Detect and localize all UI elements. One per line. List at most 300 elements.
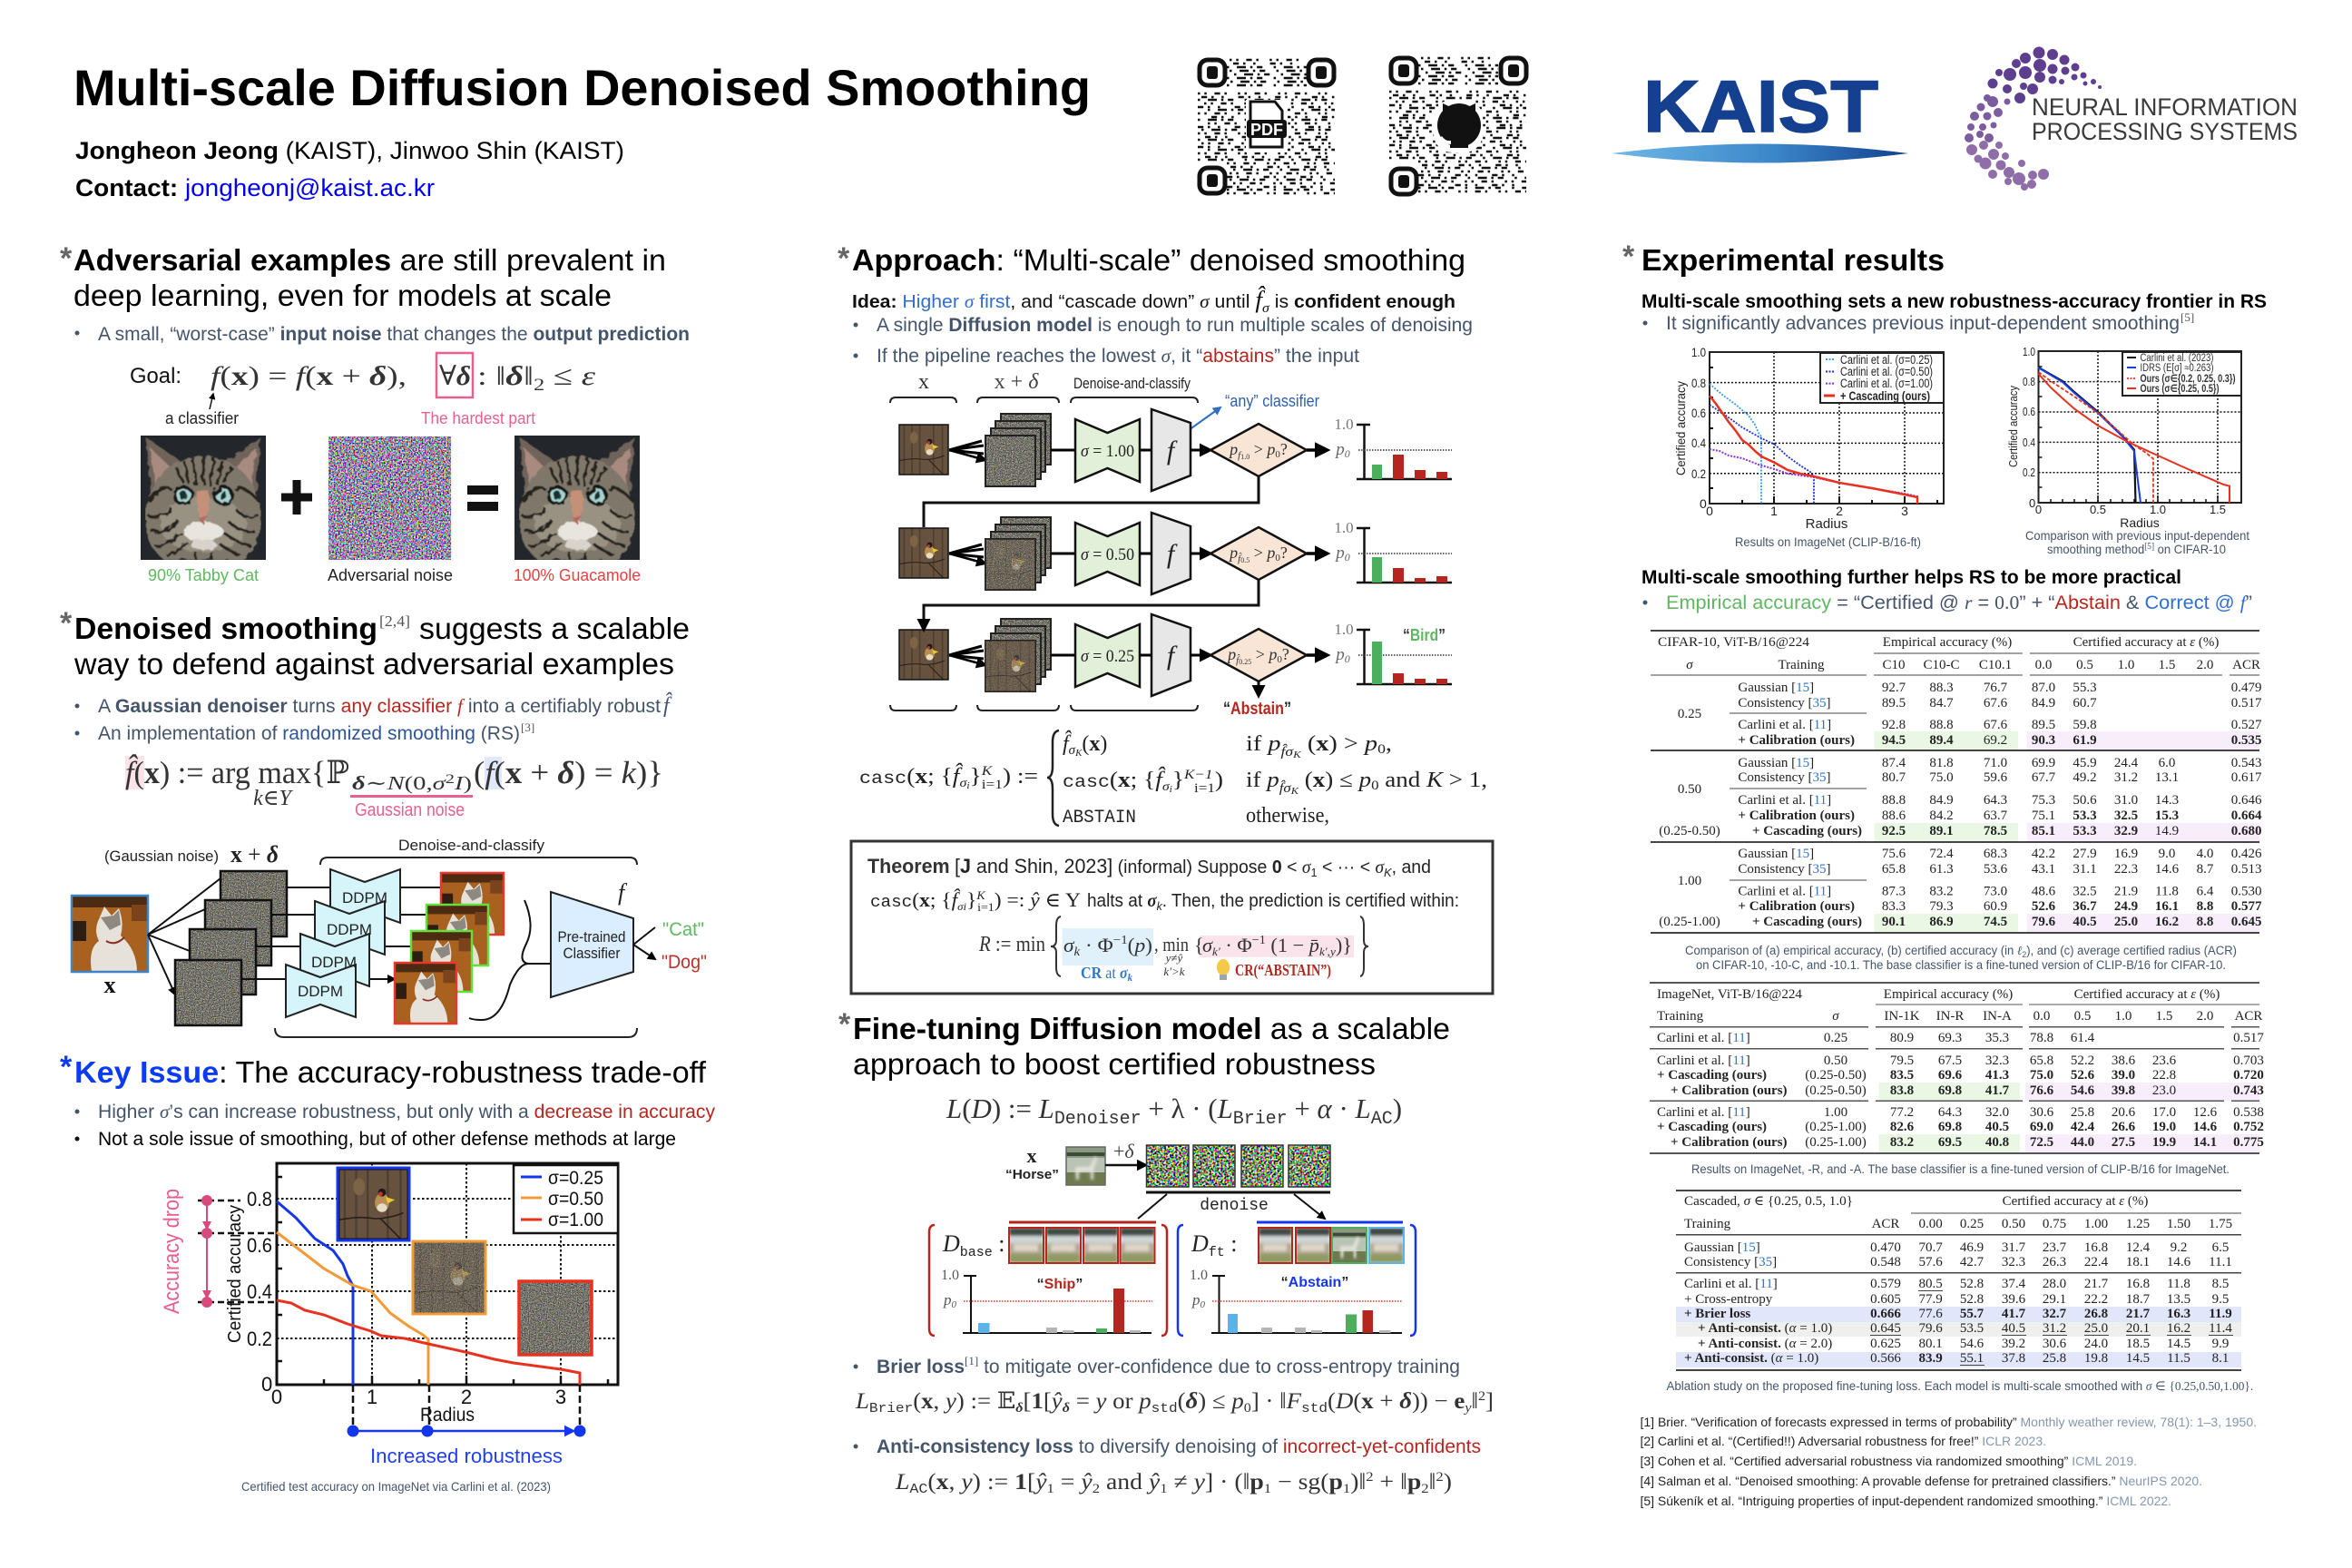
diagram: denoise-and-classify bbox=[72, 837, 707, 1037]
legend: σ=1.00 bbox=[548, 1210, 603, 1230]
annotation: accuracy drop: Accuracy drop bbox=[160, 1189, 184, 1314]
table: CIFAR-10: 81.8 bbox=[1929, 756, 1954, 770]
table: CIFAR-10: 84.2 bbox=[1929, 808, 1954, 823]
DDPM blocks: DDPM bbox=[342, 889, 387, 906]
diagram: horse example: denoise bbox=[1200, 1197, 1269, 1215]
table: ablation study: 21.7 bbox=[2126, 1307, 2151, 1321]
caption: ImageNet table: Results on ImageNet, -R, and -A. The base classifier is a fine-tuned version of CLIP-B/16 for ImageNet. bbox=[1691, 1162, 2230, 1176]
table: ablation study: 31.2 bbox=[2043, 1321, 2066, 1336]
panel: D base: 1.0 bbox=[941, 1268, 959, 1283]
table: CIFAR-10: 8.8 bbox=[2197, 899, 2213, 914]
table: ImageNet: 39.0 bbox=[2112, 1068, 2135, 1083]
table: ImageNet: 76.6 bbox=[2030, 1083, 2054, 1098]
annotation: any classifier bbox=[1182, 392, 1319, 435]
table: ImageNet: ACR bbox=[2235, 1009, 2262, 1024]
arrow: classifier bbox=[210, 394, 213, 409]
formula: Brier loss: [ bbox=[1024, 1389, 1031, 1414]
table: ImageNet: (0.25-0.50) bbox=[1805, 1068, 1867, 1083]
row: sigma 0.50 bbox=[899, 513, 1452, 594]
table: ImageNet: 40.5 bbox=[1985, 1120, 2009, 1134]
table: ablation study: 55.1 bbox=[1960, 1351, 1984, 1366]
table: CIFAR-10: 67.6 bbox=[1984, 696, 2008, 710]
table: CIFAR-10: C10-C bbox=[1923, 658, 1960, 672]
theorem condition: ) =: bbox=[995, 888, 1030, 911]
bullet: Brier loss: [1] bbox=[965, 1354, 978, 1367]
table: CIFAR-10: 15.3 bbox=[2155, 808, 2179, 823]
row: sigma 1.00: 0 bbox=[1275, 449, 1280, 460]
chart: CIFAR-10: 0.5 bbox=[2090, 503, 2106, 516]
formula: anti-consistency loss: 2 bbox=[1093, 1482, 1100, 1496]
formula: cascaded smoothing: K bbox=[981, 764, 993, 779]
table: ImageNet: 2.0 bbox=[2197, 1009, 2213, 1024]
chart: ImageNet bbox=[1673, 345, 1944, 532]
panel: D ft: 1.0 bbox=[1190, 1268, 1208, 1283]
row: sigma 1.00: > bbox=[1250, 440, 1267, 458]
table: ImageNet: 14.6 bbox=[2193, 1120, 2218, 1134]
bullets: A Gaussian denoiser turns any classifier f into a certifiably robust bbox=[98, 695, 661, 717]
table: ablation study: 11.4 bbox=[2209, 1321, 2232, 1336]
table: ablation study: 18.5 bbox=[2126, 1337, 2150, 1351]
formula: anti-consistency loss: )‖ bbox=[1350, 1470, 1366, 1494]
pre-trained classifier: f bbox=[618, 879, 628, 906]
formula: anti-consistency loss: = bbox=[1054, 1470, 1081, 1494]
heading: * bbox=[838, 1007, 851, 1042]
table: CIFAR-10: 32.5 bbox=[2114, 808, 2138, 823]
table: ImageNet: Carlini et al. [11] bbox=[1657, 1054, 1750, 1068]
table: ImageNet: 75.0 bbox=[2030, 1068, 2053, 1083]
table: ablation study: 83.9 bbox=[1918, 1351, 1943, 1366]
table: CIFAR-10: 90.1 bbox=[1882, 915, 1906, 929]
chart: ImageNet: 0 bbox=[1700, 496, 1707, 511]
table: CIFAR-10: 76.7 bbox=[1984, 681, 2008, 695]
table: CIFAR-10: 61.3 bbox=[1929, 862, 1954, 877]
formula: cascaded smoothing: 0 bbox=[1371, 779, 1379, 793]
table: ablation study: 32.7 bbox=[2043, 1307, 2067, 1321]
chart: ImageNet: Carlini et al. (σ=0.50) bbox=[1840, 365, 1933, 378]
table: CIFAR-10: 83.2 bbox=[1929, 884, 1954, 898]
table: ablation study: Gaussian [15] bbox=[1684, 1240, 1760, 1255]
bullet: anti-consistency loss: Anti-consistency loss to diversify denoising of incorrect-yet-confidents bbox=[877, 1436, 1481, 1457]
formula: Brier loss: ( bbox=[913, 1389, 921, 1414]
certified radius formula: k′ bbox=[1212, 945, 1220, 958]
table: CIFAR-10: ACR bbox=[2232, 658, 2260, 672]
icon: light bulb bbox=[1217, 959, 1230, 980]
image: bird sigma 1.00 bbox=[519, 1281, 592, 1355]
heading: Denoised smoothing bbox=[74, 612, 377, 645]
icon: plus bbox=[281, 480, 312, 514]
table: CIFAR-10: + Calibration (ours) bbox=[1738, 808, 1855, 823]
table: CIFAR-10: 31.2 bbox=[2114, 770, 2138, 785]
panel: D base bbox=[929, 1221, 1167, 1336]
formula: cascaded smoothing: f̂σ bbox=[1281, 744, 1294, 760]
table: CIFAR-10: 0.617 bbox=[2231, 770, 2262, 785]
table: CIFAR-10: 60.7 bbox=[2073, 696, 2097, 710]
table: CIFAR-10: 0.25 bbox=[1678, 707, 1701, 721]
formula: cascaded smoothing: i bbox=[1170, 785, 1172, 795]
formula: smoothed classifier: δ∼ N(0, σ bbox=[352, 772, 442, 794]
panel: denoised smoothing bbox=[60, 606, 707, 1037]
chart: CIFAR-10: IDRS (E[σ] ≈0.263) bbox=[2140, 363, 2214, 374]
logo: NeurIPS: PROCESSING SYSTEMS bbox=[2032, 118, 2298, 145]
chart: ImageNet: Carlini et al. (σ=1.00) bbox=[1840, 377, 1933, 390]
table: CIFAR-10: 53.3 bbox=[2073, 824, 2097, 838]
axis labels: Certified accuracy bbox=[225, 1205, 245, 1343]
table: ablation study: 28.0 bbox=[2043, 1277, 2066, 1291]
image: bird sigma 0.25 bbox=[338, 1168, 409, 1240]
goal formula: 2 bbox=[534, 376, 544, 395]
table: ablation study: 16.8 bbox=[2126, 1277, 2150, 1291]
formula: cascaded smoothing: ( bbox=[1298, 769, 1313, 792]
formula: anti-consistency loss: and bbox=[1100, 1470, 1149, 1494]
axis labels: Radius bbox=[420, 1405, 475, 1426]
image: adversarial noise bbox=[328, 436, 451, 560]
heading bbox=[838, 1007, 1450, 1081]
formula: cascaded smoothing: x) ≤ p bbox=[1313, 769, 1370, 792]
formula: anti-consistency loss: 2 bbox=[1436, 1470, 1444, 1485]
theorem condition: k bbox=[1157, 899, 1163, 913]
table: ablation study: 6.5 bbox=[2212, 1240, 2229, 1255]
table: CIFAR-10: Carlini et al. [11] bbox=[1738, 793, 1831, 808]
table: ablation study: 11.8 bbox=[2167, 1277, 2190, 1291]
table: ablation study: 54.6 bbox=[1960, 1337, 1984, 1351]
table: ImageNet: 20.6 bbox=[2112, 1105, 2136, 1120]
table: CIFAR-10: 11.8 bbox=[2155, 884, 2179, 898]
label: x: x bbox=[103, 972, 116, 998]
formula: Brier loss: std bbox=[1152, 1401, 1178, 1416]
formula: anti-consistency loss: 1 bbox=[1264, 1482, 1271, 1496]
table: CIFAR-10: 22.3 bbox=[2114, 862, 2138, 877]
row: sigma 1.00: p bbox=[1336, 440, 1345, 459]
axis labels: 0.8 bbox=[247, 1188, 272, 1210]
table: ImageNet: 78.8 bbox=[2030, 1031, 2053, 1045]
heading: deep learning, even for models at scale bbox=[74, 279, 612, 312]
DDPM blocks bbox=[286, 869, 400, 1017]
certified radius formula: p̄ bbox=[1308, 934, 1319, 956]
row: sigma 0.25: 0.25 bbox=[1239, 658, 1251, 666]
formula: cascaded smoothing: ( bbox=[1301, 732, 1316, 756]
row: sigma 0.25: f bbox=[1167, 641, 1178, 671]
table: ImageNet: 0.25 bbox=[1824, 1031, 1847, 1045]
formula: smoothed classifier: f̂(x) := arg max{ℙ bbox=[125, 753, 349, 790]
formula: Brier loss: Brier bbox=[869, 1401, 913, 1416]
axis labels: 0 bbox=[271, 1386, 282, 1408]
image labels: 100% Guacamole bbox=[514, 566, 641, 584]
table: ImageNet bbox=[1650, 982, 2264, 1154]
formula: cascaded smoothing: casc (x; {f̂ bbox=[1063, 769, 1161, 792]
table: ablation study: 18.1 bbox=[2126, 1255, 2150, 1269]
formula: cascaded smoothing: x) bbox=[1089, 732, 1107, 756]
panel: D ft: D bbox=[1191, 1230, 1209, 1257]
theorem condition: casc(x; {f̂ bbox=[870, 888, 957, 912]
table: ImageNet: 69.8 bbox=[1938, 1120, 1962, 1134]
axis labels bbox=[225, 1188, 566, 1426]
table: ImageNet: 0.720 bbox=[2233, 1068, 2264, 1083]
certified radius formula: )} bbox=[1336, 934, 1352, 956]
formula: anti-consistency loss: ≠ bbox=[1168, 1470, 1194, 1494]
table: CIFAR-10: 61.9 bbox=[2073, 733, 2097, 748]
table: ablation study: 30.6 bbox=[2043, 1337, 2067, 1351]
table: ablation study: 18.7 bbox=[2126, 1292, 2151, 1307]
table: ablation study: 11.5 bbox=[2167, 1351, 2190, 1366]
image: horse bbox=[1066, 1147, 1105, 1185]
chart caption: Certified test accuracy on ImageNet via Carlini et al. (2023) bbox=[241, 1479, 551, 1494]
panel: D base: base bbox=[960, 1245, 993, 1260]
table: ImageNet: 12.6 bbox=[2193, 1105, 2218, 1120]
table: CIFAR-10: 80.7 bbox=[1882, 770, 1906, 785]
table: ImageNet: 23.0 bbox=[2152, 1083, 2176, 1098]
theorem statement: < ··· < bbox=[1318, 858, 1376, 877]
table: CIFAR-10: Carlini et al. [11] bbox=[1738, 884, 1831, 898]
loss formula: AC bbox=[1371, 1109, 1393, 1130]
annotation: accuracy drop bbox=[160, 1189, 277, 1314]
table: CIFAR-10: 52.6 bbox=[2032, 899, 2056, 914]
table: ablation study: 39.6 bbox=[2002, 1292, 2026, 1307]
table: ImageNet: 80.9 bbox=[1890, 1031, 1914, 1045]
table: ImageNet: 0.517 bbox=[2233, 1031, 2264, 1045]
subheading: frontier: Multi-scale smoothing sets a new robustness-accuracy frontier in RS bbox=[1642, 291, 2267, 312]
formula: anti-consistency loss: 1 bbox=[1343, 1482, 1350, 1496]
table: CIFAR-10: 89.5 bbox=[1882, 696, 1906, 710]
heading bbox=[60, 241, 666, 312]
table: ImageNet: 77.2 bbox=[1890, 1105, 1914, 1120]
output arrows bbox=[633, 927, 655, 959]
table: CIFAR-10: 88.6 bbox=[1882, 808, 1906, 823]
loss formula: α · L bbox=[1318, 1093, 1371, 1124]
row: sigma 0.50: σ = 0.50 bbox=[1081, 545, 1134, 564]
table: CIFAR-10: 8.8 bbox=[2197, 915, 2213, 929]
table: ImageNet: (0.25-0.50) bbox=[1805, 1083, 1867, 1098]
table: ImageNet: 65.8 bbox=[2030, 1054, 2053, 1068]
axis labels: 1 bbox=[367, 1386, 377, 1408]
formula: Brier loss: x, y) := 𝔼 bbox=[921, 1389, 1012, 1414]
diagram: horse example: +δ bbox=[1113, 1140, 1134, 1162]
table: CIFAR-10: 50.6 bbox=[2073, 793, 2097, 808]
table: ImageNet: (0.25-1.00) bbox=[1805, 1135, 1867, 1150]
certified radius formula: , min bbox=[1154, 933, 1189, 956]
contact: Contact: jongheonj@kaist.ac.kr bbox=[75, 174, 435, 201]
idea text: is bbox=[1269, 292, 1294, 312]
table: CIFAR-10: 0.527 bbox=[2231, 718, 2262, 732]
table: ablation study: 42.7 bbox=[1960, 1255, 1984, 1269]
row: sigma 0.50: 0 bbox=[1345, 551, 1350, 564]
bullets: f̂ bbox=[663, 692, 672, 718]
table: CIFAR-10: 36.7 bbox=[2073, 899, 2097, 914]
table: CIFAR-10: 88.8 bbox=[1882, 793, 1906, 808]
table: ImageNet: 83.2 bbox=[1890, 1135, 1914, 1150]
table: CIFAR-10: 21.9 bbox=[2114, 884, 2138, 898]
formula: Brier loss: L bbox=[855, 1389, 869, 1414]
goal formula: ∀δ bbox=[439, 361, 471, 391]
chart: CIFAR-10: Ours (σ∈{0.25, 0.5}) bbox=[2140, 384, 2220, 395]
references: [2] Carlini et al. “(Certified!!) Adversarial robustness for free!” ICLR 2023. bbox=[1641, 1434, 2046, 1448]
row: sigma 1.00: f bbox=[1167, 436, 1178, 466]
table: ImageNet: 0.752 bbox=[2233, 1120, 2264, 1134]
panel: key issue bbox=[60, 1050, 715, 1494]
table: CIFAR-10: 89.1 bbox=[1929, 824, 1954, 838]
table: ImageNet: 69.0 bbox=[2030, 1120, 2053, 1134]
icon: QR code for GitHub bbox=[1389, 58, 1526, 194]
pre-trained classifier: Classifier bbox=[563, 945, 621, 962]
caption: CIFAR-10 table: Comparison of (a) empirical accuracy, (b) certified accuracy (in ℓ bbox=[1685, 944, 2024, 957]
table: ImageNet: 83.5 bbox=[1890, 1068, 1914, 1083]
row: sigma 1.00: f bbox=[1238, 450, 1242, 461]
table: ablation study: 20.1 bbox=[2126, 1321, 2150, 1336]
formula: anti-consistency loss: 2 bbox=[1366, 1470, 1374, 1485]
table: CIFAR-10: 72.4 bbox=[1929, 847, 1954, 861]
formula: cascaded smoothing: K−1 bbox=[1183, 768, 1212, 782]
bullets: Higher σ’s can increase robustness, but only with a decrease in accuracy bbox=[98, 1101, 715, 1122]
table: ablation study: 25.8 bbox=[2043, 1351, 2066, 1366]
formula: Brier loss: δ bbox=[1015, 1401, 1024, 1416]
certified radius formula: (1 − bbox=[1266, 934, 1309, 956]
output labels bbox=[662, 919, 707, 973]
formula: Brier loss: D(x + δ)) − e bbox=[1336, 1389, 1465, 1414]
table: CIFAR-10: Consistency [35] bbox=[1738, 862, 1830, 877]
diagram: horse example: x bbox=[1027, 1144, 1036, 1167]
heading: Adversarial examples are still prevalent in bbox=[74, 243, 666, 277]
bullets bbox=[74, 692, 672, 744]
formula: cascaded smoothing: K bbox=[1074, 748, 1083, 759]
label: Abstain: “Abstain” bbox=[1223, 700, 1291, 719]
curve: sigma 0.25 bbox=[277, 1201, 353, 1385]
table: CIFAR-10: 89.5 bbox=[2032, 718, 2055, 732]
noisy images bbox=[175, 871, 287, 1025]
table: CIFAR-10: 0.50 bbox=[1678, 782, 1701, 797]
row: sigma 0.25: 1.0 bbox=[1334, 621, 1354, 638]
table: CIFAR-10: 53.6 bbox=[1984, 862, 2008, 877]
formula: cascaded smoothing: ABSTAIN bbox=[1063, 808, 1136, 828]
table: CIFAR-10: 92.7 bbox=[1882, 681, 1906, 695]
table: ImageNet: Carlini et al. [11] bbox=[1657, 1031, 1750, 1045]
formula: anti-consistency loss: + ‖ bbox=[1374, 1470, 1407, 1494]
table: CIFAR-10: 32.5 bbox=[2073, 884, 2097, 898]
table: ablation study: 0.548 bbox=[1870, 1255, 1901, 1269]
subheading: practical: Multi-scale smoothing further helps RS to be more practical bbox=[1642, 567, 2181, 588]
table: ablation study: 29.1 bbox=[2043, 1292, 2066, 1307]
diagram: horse example bbox=[929, 1140, 1416, 1336]
table: CIFAR-10: 53.3 bbox=[2073, 808, 2097, 823]
row: sigma 0.50: f bbox=[1167, 539, 1178, 569]
table: CIFAR-10: 0.517 bbox=[2231, 696, 2262, 710]
bullet text: A small, “worst-case” input noise that changes the output prediction bbox=[98, 324, 690, 345]
column headers: x + δ bbox=[995, 370, 1039, 394]
goal formula: Goal: bbox=[130, 364, 181, 388]
table: ablation study: 11.9 bbox=[2209, 1307, 2232, 1321]
formula: cascaded smoothing: K > 1, bbox=[1426, 769, 1483, 792]
formula: Brier loss: ] · ‖ bbox=[1251, 1389, 1287, 1414]
theorem condition: i=1 bbox=[977, 900, 995, 914]
references: [5] Súkeník et al. “Intriguing properties of input-dependent randomized smoothing.” ICML 2022. bbox=[1641, 1494, 2171, 1508]
table: CIFAR-10: 14.6 bbox=[2155, 862, 2180, 877]
caption: CIFAR-10 chart: [5] bbox=[2144, 542, 2154, 552]
chart: CIFAR-10: 1.0 bbox=[2150, 503, 2166, 516]
table: CIFAR-10: 78.5 bbox=[1984, 824, 2007, 838]
table: CIFAR-10: 43.1 bbox=[2032, 862, 2055, 877]
certified radius formula: CR(“ABSTAIN”) bbox=[1235, 961, 1331, 980]
table: CIFAR-10: 84.7 bbox=[1929, 696, 1954, 710]
table: ImageNet: 1.0 bbox=[2115, 1009, 2132, 1024]
table: CIFAR-10: 0.543 bbox=[2231, 756, 2261, 770]
formula: smoothed classifier: Gaussian noise bbox=[355, 800, 465, 820]
formula: Brier loss: = bbox=[1070, 1389, 1096, 1414]
table: CIFAR-10: (0.25-0.50) bbox=[1659, 824, 1720, 838]
table: ablation study bbox=[1676, 1190, 2241, 1371]
table: CIFAR-10: Gaussian [15] bbox=[1738, 756, 1814, 770]
table: ImageNet: 1.00 bbox=[1824, 1105, 1847, 1120]
label: a classifier: a classifier bbox=[165, 409, 239, 427]
table: ImageNet: 32.0 bbox=[1985, 1105, 2009, 1120]
heading: * bbox=[1622, 240, 1635, 274]
bullet: empirical accuracy: Empirical accuracy = “Certified @ r = 0.0” + “Abstain & Correct @ f” bbox=[1666, 592, 2252, 613]
formula: cascaded smoothing: x) > p bbox=[1316, 732, 1376, 756]
panel: D ft: : bbox=[1225, 1230, 1238, 1257]
panel: D base: p bbox=[944, 1291, 951, 1308]
image: cat bbox=[141, 436, 266, 560]
table: ImageNet: 52.2 bbox=[2071, 1054, 2094, 1068]
table: ablation study: 16.2 bbox=[2167, 1321, 2190, 1336]
table: ablation study: 52.8 bbox=[1960, 1277, 1984, 1291]
theorem statement: Theorem [J and Shin, 2023] (informal) Suppose 0 < σ bbox=[867, 855, 1311, 877]
output labels: "Dog" bbox=[662, 952, 707, 973]
curve: sigma 1.00 bbox=[277, 1300, 580, 1385]
formula: anti-consistency loss: − sg( bbox=[1271, 1470, 1329, 1494]
table: CIFAR-10: 88.8 bbox=[1929, 718, 1954, 732]
table: ablation study: 8.1 bbox=[2212, 1351, 2229, 1366]
table: ImageNet: 38.6 bbox=[2112, 1054, 2136, 1068]
caption: CIFAR-10 chart bbox=[2025, 528, 2249, 556]
table: ImageNet: 0.538 bbox=[2233, 1105, 2264, 1120]
table: ablation study: 21.7 bbox=[2084, 1277, 2109, 1291]
diagram: multi-scale pipeline bbox=[890, 370, 1452, 719]
theorem condition: ŷ ∈ Y bbox=[1030, 888, 1078, 911]
table: CIFAR-10: 14.9 bbox=[2155, 824, 2179, 838]
table: ImageNet: 72.5 bbox=[2030, 1135, 2053, 1150]
formula: Brier loss: ‖ bbox=[1471, 1389, 1478, 1414]
formula: cascaded smoothing: ) := bbox=[1003, 765, 1038, 789]
table: CIFAR-10: 0.479 bbox=[2231, 681, 2261, 695]
formula: cascaded smoothing: ) bbox=[1215, 769, 1223, 792]
table: ablation study: 80.5 bbox=[1918, 1277, 1943, 1291]
table: CIFAR-10: 27.9 bbox=[2073, 847, 2097, 861]
theorem statement: σ bbox=[1376, 858, 1385, 877]
theorem condition: halts at σ bbox=[1087, 891, 1157, 911]
table: CIFAR-10: 85.1 bbox=[2032, 824, 2055, 838]
image labels: Adversarial noise bbox=[328, 566, 453, 584]
table: ablation study: 9.9 bbox=[2212, 1337, 2229, 1351]
table: ImageNet: 27.5 bbox=[2112, 1135, 2135, 1150]
certified radius formula: ( bbox=[1128, 934, 1134, 956]
bullets: [3] bbox=[521, 720, 534, 734]
table: CIFAR-10: σ bbox=[1686, 658, 1693, 672]
formula: cascaded smoothing: otherwise, bbox=[1246, 804, 1329, 828]
row: sigma 0.25: σ = 0.25 bbox=[1081, 647, 1134, 666]
chart: ImageNet: 1.0 bbox=[1691, 345, 1706, 359]
idea text: Idea: Higher σ first, and “cascade down” σ until f̂ bbox=[852, 287, 1262, 313]
theorem condition: K bbox=[975, 888, 986, 902]
table: ImageNet: IN-A bbox=[1983, 1009, 2012, 1024]
table: CIFAR-10: 79.6 bbox=[2032, 915, 2056, 929]
panel: D ft: 0 bbox=[1200, 1299, 1205, 1310]
formula: anti-consistency loss: ‖ bbox=[1429, 1470, 1436, 1494]
row: sigma 1.00: 0 bbox=[1345, 447, 1350, 460]
row: sigma 1.00: ? bbox=[1280, 440, 1288, 458]
bullet: [5] bbox=[2180, 310, 2194, 324]
formula: anti-consistency loss: ( bbox=[927, 1470, 936, 1494]
table: CIFAR-10: 0.513 bbox=[2231, 862, 2261, 877]
heading: way to defend against adversarial examples bbox=[74, 647, 674, 681]
panel: approach bbox=[838, 241, 1493, 994]
formula: Brier loss: ] bbox=[1485, 1389, 1494, 1414]
